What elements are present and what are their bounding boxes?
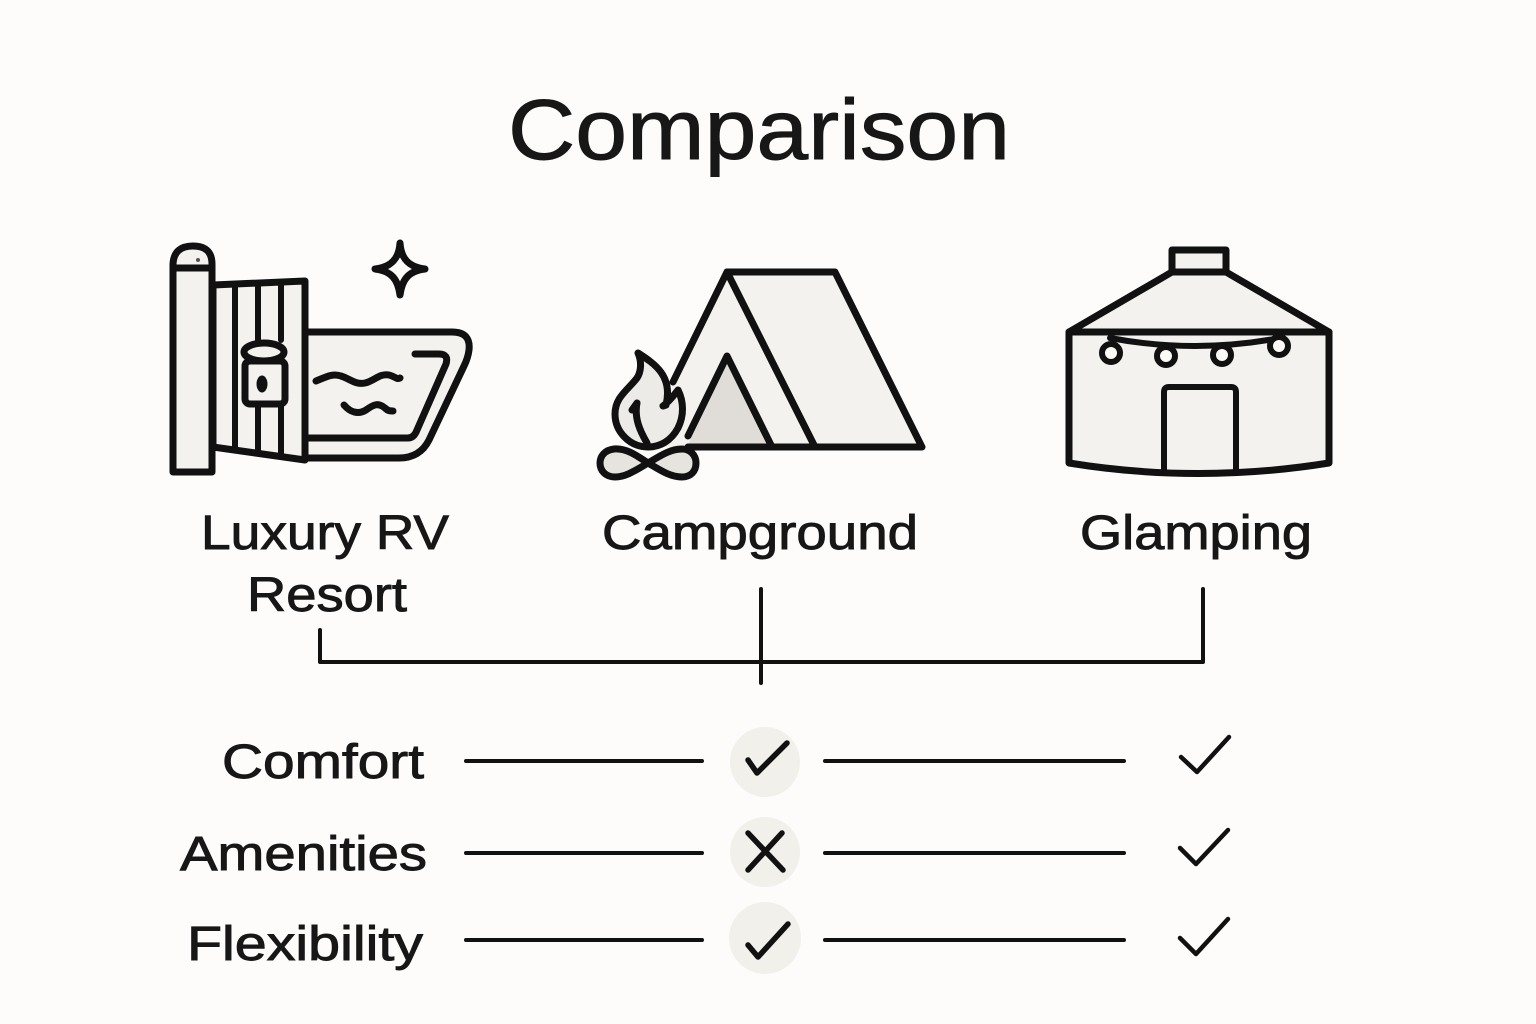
label: Luxury RV Resort: Resort bbox=[247, 569, 407, 622]
yurt chimney bbox=[1172, 250, 1226, 272]
row: Comfort bbox=[222, 727, 1229, 797]
logs bbox=[600, 449, 696, 477]
icon: sparkle bbox=[375, 243, 425, 295]
icon: campground tent bbox=[600, 272, 922, 477]
yurt body bbox=[1069, 332, 1329, 474]
label: Luxury RV Resort bbox=[201, 507, 449, 622]
gate bbox=[213, 281, 305, 460]
door bbox=[1164, 387, 1236, 470]
string lights bbox=[1110, 338, 1280, 346]
row: Comfort: Comfort bbox=[222, 736, 424, 789]
connector bracket bbox=[320, 589, 1203, 683]
icon: luxury RV resort bbox=[173, 243, 469, 472]
row: Amenities: Amenities bbox=[180, 828, 427, 881]
title: Comparison bbox=[508, 83, 1010, 178]
yurt roof bbox=[1069, 272, 1329, 332]
flame bbox=[615, 353, 682, 447]
padlock bbox=[245, 361, 285, 404]
row: Flexibility: Flexibility bbox=[187, 918, 423, 971]
pool bbox=[305, 332, 469, 458]
tent inner opening bbox=[688, 356, 772, 445]
icon: glamping yurt bbox=[1069, 250, 1329, 474]
gate post bbox=[173, 268, 212, 472]
row: Amenities bbox=[180, 817, 1228, 887]
label: Campground: Campground bbox=[602, 507, 918, 560]
row: Flexibility bbox=[187, 902, 1228, 974]
label: Glamping: Glamping bbox=[1080, 507, 1312, 560]
label: Luxury RV Resort: Luxury RV bbox=[201, 507, 449, 560]
